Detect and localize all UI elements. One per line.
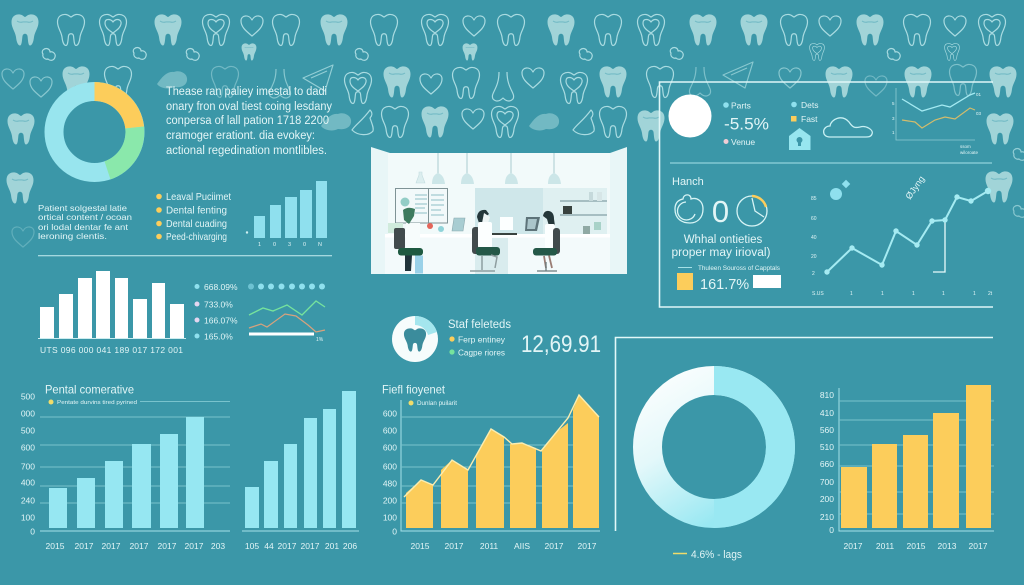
x axis labels: 201: [325, 541, 339, 551]
y axis labels: 500: [21, 392, 35, 402]
large line chart: 1: [881, 291, 884, 297]
small bar chart: 3: [288, 242, 291, 248]
white bar chart: UTS 096 000 041 189 017 172 001: [40, 345, 183, 355]
x axis labels: 2017: [130, 541, 149, 551]
y axis labels: 700: [820, 477, 834, 487]
y axis labels: [21, 392, 35, 536]
panel caption: proper may irioval): [672, 247, 771, 259]
y axis labels: 210: [820, 512, 834, 522]
stat block: Venue: [731, 137, 755, 147]
large line chart: 20: [811, 254, 817, 260]
large line chart: [811, 174, 993, 297]
notice board: [396, 188, 448, 223]
y axis labels: 100: [21, 512, 35, 522]
icons and zero: [675, 194, 767, 229]
y axis labels: 200: [820, 494, 834, 504]
legend list: Dental fenting: [166, 206, 227, 216]
icon: tooth badge: [392, 316, 438, 362]
percent legend: [194, 282, 238, 342]
x axis labels: 2017: [844, 541, 863, 551]
y axis labels: 660: [820, 459, 834, 469]
x axis labels: 2017: [102, 541, 121, 551]
large line chart: 1: [850, 291, 853, 297]
y axis labels: 480: [383, 478, 397, 488]
bars: [841, 385, 991, 528]
large line chart: 85: [811, 196, 817, 202]
y axis labels: 700: [21, 462, 35, 472]
y axis labels: 510: [820, 442, 834, 452]
chart title: Fiefl fioyenet: [382, 382, 446, 396]
dot row and mini line chart: [248, 284, 325, 343]
y axis labels: [820, 390, 834, 535]
icon: house: [789, 128, 810, 150]
chart legend: [48, 400, 230, 406]
percent legend: 668.09%: [204, 282, 238, 292]
y axis labels: 500: [21, 426, 35, 436]
dot row and mini line chart: 1%: [316, 337, 324, 343]
staff legend: Ferp entiney: [458, 336, 505, 344]
percent legend: 166.07%: [204, 316, 238, 326]
stat block: Parts: [731, 100, 751, 110]
x axis labels: [411, 541, 597, 551]
intro paragraph: Thease ran paliey imestal to dadi: [166, 86, 327, 98]
intro paragraph: actional regedination montlibles.: [166, 145, 327, 157]
y axis labels: 240: [21, 496, 35, 506]
donut caption: 4.6% - lags: [691, 549, 742, 561]
intro paragraph: [166, 86, 332, 157]
y axis labels: 600: [383, 462, 397, 472]
chart legend: Pentate durvins tired pyrined: [57, 400, 137, 406]
staff legend: [449, 336, 505, 358]
icon: cloud: [824, 118, 872, 137]
person one: [388, 208, 444, 274]
staff heading: Staf feleteds: [448, 319, 511, 331]
y axis labels: 0: [30, 526, 35, 536]
y axis labels: 560: [820, 425, 834, 435]
y axis labels: 200: [383, 496, 397, 506]
y axis labels: 100: [383, 512, 397, 522]
y axis labels: 400: [21, 478, 35, 488]
x axis labels: AIIS: [514, 541, 530, 551]
shelves: [560, 192, 607, 234]
bottom right frame: [616, 338, 993, 531]
intro paragraph: conpersa of lall pation 1718 2200: [166, 115, 329, 127]
x axis labels: 2017: [185, 541, 204, 551]
large line chart: S.US: [812, 291, 824, 297]
x axis labels: 2017: [75, 541, 94, 551]
mini line chart: 1: [892, 130, 895, 135]
bars group one: [49, 417, 204, 528]
chart title: Pental comerative: [45, 382, 134, 396]
bars group two: [245, 391, 356, 528]
panel caption: Whhal ontieties: [684, 234, 763, 246]
bottom right bar chart: [820, 385, 994, 551]
y axis labels: [383, 408, 397, 536]
donut chart top left: [54, 82, 144, 180]
percent legend: 165.0%: [204, 332, 233, 342]
x axis labels: 206: [343, 541, 357, 551]
person three: [533, 211, 560, 271]
x axis labels: 2011: [480, 541, 498, 551]
side note: leroning clentis.: [38, 231, 107, 241]
mini line chart: ssom: [960, 144, 971, 149]
intro paragraph: onary fron oval tiest coing lesdany: [166, 101, 332, 113]
large line chart: 2: [812, 271, 815, 277]
legend list: Leaval Puciimet: [166, 192, 231, 203]
small bar chart: 0: [273, 242, 276, 248]
x axis labels: 105: [245, 541, 259, 551]
background tooth pattern: [2, 14, 1024, 247]
x axis labels: 2017: [545, 541, 564, 551]
x axis labels: 2015: [411, 541, 430, 551]
x axis labels: 2017: [278, 541, 297, 551]
side note: ortical content / ocoan: [38, 212, 132, 222]
x axis labels: 2017: [578, 541, 597, 551]
lab scene illustration: [371, 147, 627, 274]
x axis labels: 2011: [876, 541, 894, 551]
mini line chart: [892, 88, 982, 155]
staff number: 12,69.91: [521, 331, 601, 358]
intro paragraph: cramoger erationt. dia evokey:: [166, 130, 315, 142]
bottom left bar chart: [21, 382, 359, 551]
white circle: [668, 94, 712, 138]
large line chart: ØJyng: [903, 174, 927, 201]
side note: [38, 203, 132, 241]
large donut chart: [648, 366, 795, 528]
chart legend: Dunlan puilarit: [417, 401, 457, 407]
y axis labels: 600: [383, 442, 397, 452]
y axis labels: 0: [392, 526, 397, 536]
y axis labels: 0: [829, 525, 834, 535]
side note: Patient solgestal latie: [38, 203, 127, 213]
top right panel frame: [660, 82, 993, 307]
x axis labels: 203: [211, 541, 225, 551]
mini line chart: wiloroate: [960, 150, 979, 155]
monitors: [492, 217, 540, 235]
x axis labels: 2017: [158, 541, 177, 551]
yellow bars: [406, 395, 599, 528]
small bar chart: 1: [258, 242, 261, 248]
x axis labels: [844, 541, 988, 551]
stat block: [723, 100, 818, 147]
white bar chart: [38, 271, 186, 355]
large line chart: 1: [973, 291, 976, 297]
x axis labels: 44: [264, 541, 274, 551]
yellow area bar chart: [382, 382, 600, 551]
small bar chart: N: [318, 242, 322, 248]
x axis labels: 2017: [301, 541, 320, 551]
percentage callout: Thuleen Souross of Capptals: [698, 265, 780, 272]
legend list: [156, 192, 231, 243]
icons and zero: 0: [712, 194, 729, 229]
large line chart: 1: [912, 291, 915, 297]
pendant lamps: [416, 153, 561, 184]
x axis labels: 2017: [445, 541, 464, 551]
x axis labels: [46, 541, 357, 551]
stat block: Dets: [801, 100, 818, 110]
small bar chart: [246, 181, 327, 248]
mini line chart: 3: [892, 116, 895, 121]
y axis labels: 410: [820, 408, 834, 418]
x axis labels: 2015: [46, 541, 65, 551]
x axis labels: 2013: [938, 541, 957, 551]
trend line: [404, 395, 599, 497]
stat block: -5.5%: [724, 114, 769, 134]
panel heading: Hanch: [672, 176, 704, 188]
mini line chart: 01: [976, 92, 982, 97]
mini line chart: 03: [976, 111, 982, 116]
stat block: Fast: [801, 114, 818, 124]
mini line chart: 5: [892, 101, 895, 106]
y axis labels: 600: [21, 442, 35, 452]
y axis labels: 810: [820, 390, 834, 400]
tablet: [452, 218, 465, 231]
x axis labels: 2017: [969, 541, 988, 551]
y axis labels: 000: [21, 408, 35, 418]
large line chart: 60: [811, 216, 817, 222]
small bar chart: 0: [303, 242, 306, 248]
legend list: Dental cuading: [166, 219, 227, 230]
panel caption: [672, 234, 771, 259]
y axis labels: 600: [383, 426, 397, 436]
person two: [470, 210, 500, 271]
large line chart: 40: [811, 235, 817, 241]
percent legend: 733.0%: [204, 300, 233, 310]
large line chart: 2t: [988, 291, 993, 297]
legend list: Peed-chivarging: [166, 232, 227, 243]
staff legend: Cagpe riores: [458, 348, 505, 358]
y axis labels: 600: [383, 408, 397, 418]
percentage callout: 161.7%: [700, 277, 749, 293]
percentage callout: [677, 265, 781, 293]
staff section: [392, 316, 601, 362]
large line chart: 1: [942, 291, 945, 297]
x axis labels: 2015: [907, 541, 926, 551]
side note: ori lodal dentar fe ant: [38, 222, 129, 232]
